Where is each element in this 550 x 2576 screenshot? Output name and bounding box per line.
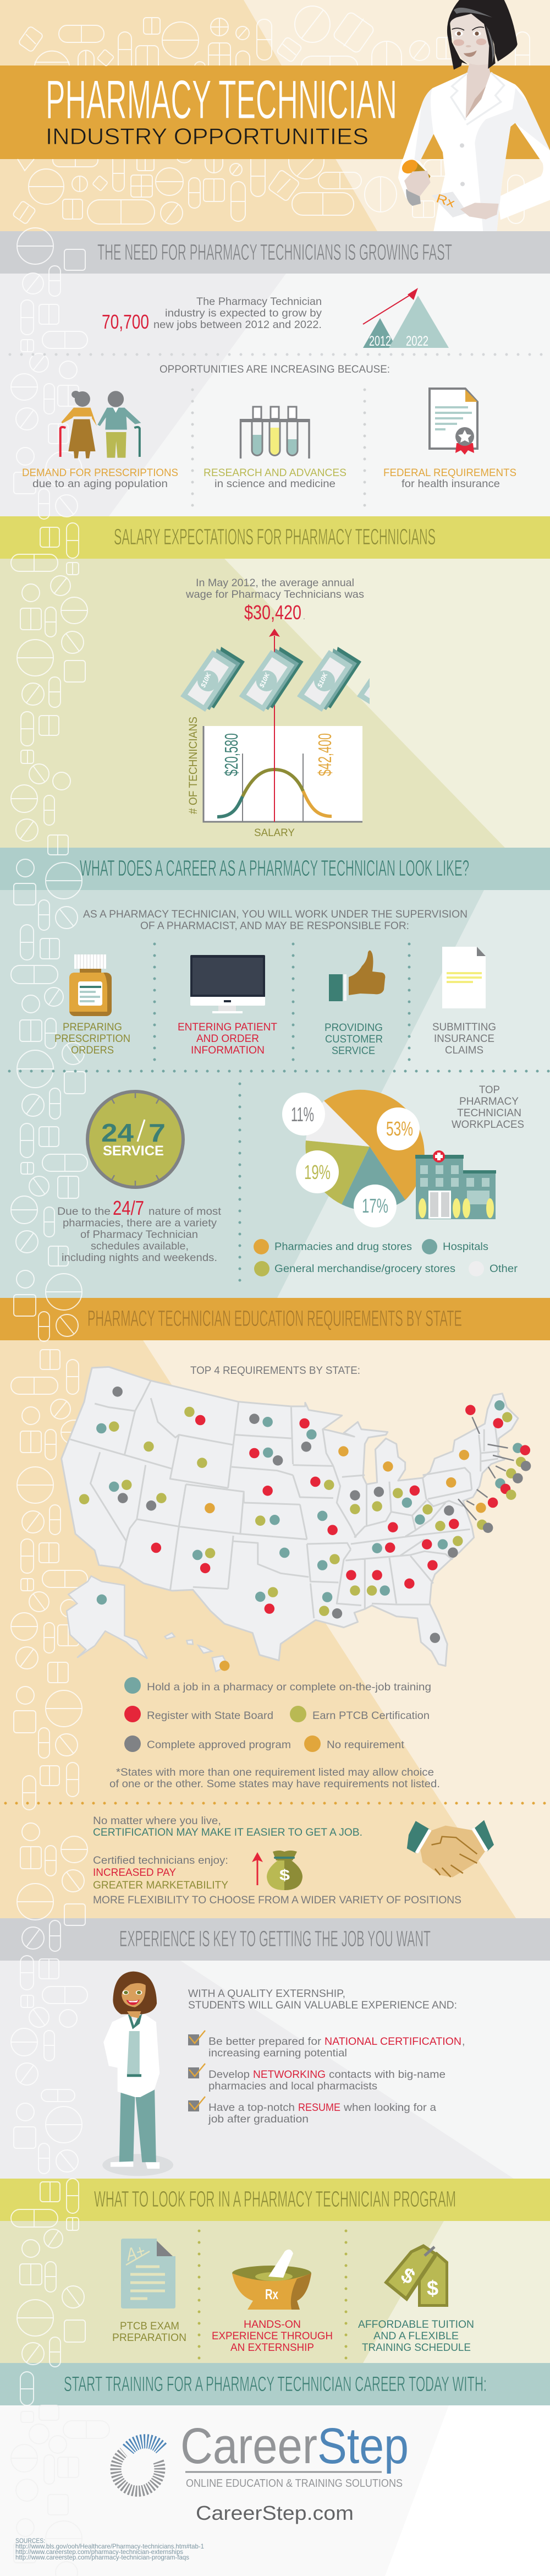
checklist item 1: Be better prepared for: [208, 2035, 322, 2048]
checklist item 3: RESUME: [298, 2102, 340, 2114]
chart: growth mountains: [363, 288, 449, 349]
legend: requirements: [124, 1677, 431, 1752]
icon: 24/7 clock: [87, 1091, 183, 1187]
label: research and advances: RESEARCH AND ADVANCES: [204, 467, 346, 479]
label: entering patient information: INFORMATION: [191, 1044, 265, 1056]
chart: workplaces pie: 19%: [304, 1161, 331, 1183]
axis label: SALARY: [254, 827, 295, 839]
label: preparing prescription orders: [54, 1021, 130, 1056]
icon: money stack 4 cropped: [357, 678, 370, 705]
footnote: states: *States with more than one requirement listed may allow choice: [116, 1766, 434, 1778]
label: hands-on experience: [212, 2318, 333, 2354]
text block: externship: [188, 1988, 457, 2011]
label: submitting insurance claims: INSURANCE: [434, 1033, 494, 1045]
number: 70,700: 70,700: [102, 310, 149, 333]
chart: growth mountains: 2012: [369, 334, 391, 349]
icon: thumbs up: [329, 951, 385, 1001]
text block: certification: INCREASED PAY: [93, 1866, 176, 1879]
checklist item 2: Develop: [208, 2069, 250, 2081]
text block: average wage: .: [303, 612, 305, 621]
sources: http://www.careerstep.com/pharmacy-technician-program-faqs: [15, 2553, 189, 2561]
label: federal requirements: [383, 467, 516, 490]
text block: schedules: [57, 1197, 222, 1264]
map: United States: [62, 1367, 531, 1672]
icon: test tubes: [240, 407, 310, 459]
hero prescription label: Rx: [435, 191, 457, 210]
text block: certification: No matter where you live,: [93, 1815, 221, 1827]
icons: money stacks: [180, 647, 370, 712]
checklist item 3: job after graduation: [208, 2113, 309, 2125]
icon: insurance claim document: [442, 947, 486, 1008]
website: CareerStep.com: [196, 2502, 354, 2524]
icon: 24/7 clock: SERVICE: [103, 1143, 164, 1159]
hero illustration: pharmacist woman: [398, 0, 550, 231]
label: demand for prescriptions: [22, 467, 178, 490]
checklist item 1: ,: [462, 2035, 465, 2048]
checklist item 3: when looking for a: [343, 2102, 436, 2114]
axis label: # OF TECHNICIANS: [187, 717, 200, 814]
icon: money stack 2: $10K: [257, 671, 272, 689]
legend: workplaces: General merchandise/grocery stores: [274, 1263, 455, 1275]
label: entering patient information: ENTERING PATIENT: [178, 1021, 277, 1033]
chart: workplaces pie: 11%: [291, 1103, 314, 1126]
logo: CareerStep: Career: [180, 2418, 317, 2474]
checklist item 2: NETWORKING: [253, 2069, 326, 2081]
label: research and advances: in science and medicine: [215, 478, 336, 490]
sources: http://www.bls.gov/ooh/Healthcare/Pharmacy-technicians.htm#tab-1: [15, 2542, 204, 2550]
icon: money bag: [267, 1851, 302, 1890]
legend: workplaces: Pharmacies and drug stores: [274, 1241, 412, 1253]
chart: workplaces pie: [282, 1090, 425, 1227]
text block: job growth: The Pharmacy Technician: [196, 296, 322, 308]
text block: externship: STUDENTS WILL GAIN VALUABLE EXPERIENCE AND:: [188, 1999, 457, 2011]
icon: mortar and pestle: Rx: [265, 2286, 278, 2302]
label: demand for prescriptions: DEMAND FOR PRESCRIPTIONS: [22, 467, 178, 479]
value: low salary: $20,580: [221, 733, 241, 776]
legend: requirements: Complete approved program: [147, 1739, 291, 1751]
label: entering patient information: [178, 1021, 277, 1056]
icon: hospital: [415, 1150, 496, 1219]
arrow: growth: [363, 288, 418, 324]
icon: money stack 2: [239, 647, 304, 712]
legend: requirements: Register with State Board: [147, 1710, 273, 1722]
chart: workplaces pie: 17%: [362, 1194, 388, 1217]
label: top workplaces: WORKPLACES: [452, 1118, 524, 1131]
logo: CareerStep: ONLINE EDUCATION & TRAINING SOLUTIONS: [186, 2477, 403, 2490]
label: hands-on experience: EXPERIENCE THROUGH: [212, 2330, 333, 2342]
text block: job growth: industry is expected to grow by: [165, 307, 322, 319]
label: hands-on experience: AN EXTERNSHIP: [230, 2342, 314, 2354]
legend: requirements: No requirement: [327, 1739, 405, 1751]
text block: certification: CERTIFICATION MAY MAKE IT EASIER TO GET A JOB.: [93, 1826, 362, 1838]
icon: price tags: $: [397, 2263, 419, 2289]
value: high salary: $42,400: [315, 733, 335, 776]
label: preparing prescription orders: PREPARING: [63, 1021, 122, 1033]
text block: schedules: nature of most: [148, 1205, 222, 1218]
icon: prescription bottle: [69, 954, 112, 1016]
arrow: average salary line: [269, 629, 280, 822]
legend: workplaces: Hospitals: [443, 1241, 488, 1253]
text block: certification: [93, 1815, 461, 1906]
illustration: student pharmacy technician: [102, 1972, 173, 2176]
checklist item 2: pharmacies and local pharmacists: [208, 2080, 377, 2092]
subtitle: INDUSTRY OPPORTUNITIES: [46, 123, 369, 149]
label: top workplaces: PHARMACY: [459, 1095, 519, 1107]
chart: salary bell curve: [187, 717, 362, 839]
text block: supervision: AS A PHARMACY TECHNICIAN, YOU WILL WORK UNDER THE SUPERVISION: [83, 908, 468, 920]
legend: requirements: Hold a job in a pharmacy or complete on-the-job training: [147, 1681, 431, 1693]
sources: http://www.careerstep.com/pharmacy-technician-externships: [15, 2548, 183, 2556]
arrow: increased pay: [252, 1852, 263, 1885]
text block: schedules: Due to the: [57, 1205, 111, 1218]
label: preparing prescription orders: PRESCRIPTION: [54, 1033, 130, 1045]
checklist item 2: [188, 2064, 446, 2092]
sources: [15, 2537, 204, 2561]
icon: 24/7 clock: 7: [148, 1118, 166, 1147]
label: affordable tuition: [358, 2318, 474, 2354]
label: providing customer service: [324, 1022, 383, 1057]
label: top workplaces: TECHNICIAN: [457, 1107, 521, 1119]
checklist item 3: Have a top-notch: [208, 2102, 295, 2114]
label: hands-on experience: HANDS-ON: [244, 2318, 301, 2331]
label: top workplaces: [452, 1084, 524, 1131]
text block: schedules: pharmacies, there are a variety: [63, 1217, 217, 1229]
text block: job growth: [102, 296, 322, 333]
text block: schedules: including nights and weekends.: [62, 1252, 217, 1264]
checklist item 2: contacts with big-name: [329, 2069, 446, 2081]
label: PTCB exam preparation: [112, 2320, 186, 2344]
legend: requirements: Earn PTCB Certification: [312, 1710, 430, 1722]
icon: money stack 1: [180, 647, 245, 712]
icon: handshake: [407, 1820, 494, 1878]
logo: CareerStep: [116, 2418, 409, 2491]
logo mark: [116, 2441, 162, 2491]
text block: average wage: wage for Pharmacy Technicians was: [185, 588, 364, 601]
label: PTCB exam preparation: PTCB EXAM: [120, 2320, 179, 2332]
footnote: states: [109, 1766, 440, 1790]
icon: certificate document: [430, 389, 477, 455]
text block: job growth: new jobs between 2012 and 2022.: [153, 319, 322, 331]
chart: workplaces pie: 53%: [386, 1117, 413, 1140]
sources: SOURCES:: [15, 2537, 45, 2545]
checklist item 1: NATIONAL CERTIFICATION: [324, 2035, 461, 2048]
icon: price tags: $: [427, 2277, 438, 2300]
checklist item 3: [188, 2097, 436, 2125]
label: demand for prescriptions: due to an aging population: [32, 478, 168, 490]
label: federal requirements: FEDERAL REQUIREMENTS: [383, 467, 516, 479]
label: entering patient information: AND ORDER: [196, 1033, 259, 1045]
label: PTCB exam preparation: PREPARATION: [112, 2332, 186, 2344]
icon: money stack 3: $10K: [316, 671, 329, 689]
subheading: opportunities: OPPORTUNITIES ARE INCREASING BECAUSE:: [160, 363, 390, 375]
chart: growth mountains: 2022: [406, 334, 428, 349]
icon: computer monitor: [190, 955, 265, 1013]
label: submitting insurance claims: CLAIMS: [445, 1044, 483, 1056]
label: providing customer service: CUSTOMER: [325, 1033, 383, 1045]
label: affordable tuition: AFFORDABLE TUITION: [358, 2318, 474, 2331]
subheading: top 4 requirements: TOP 4 REQUIREMENTS BY STATE:: [190, 1365, 360, 1377]
label: submitting insurance claims: [432, 1021, 496, 1056]
text block: certification: MORE FLEXIBILITY TO CHOOSE FROM A WIDER VARIETY OF POSITIONS: [93, 1894, 461, 1906]
icon: price tags: [384, 2244, 448, 2307]
number: $30,420: $30,420: [244, 601, 301, 624]
title: [46, 69, 397, 149]
label: providing customer service: PROVIDING: [324, 1022, 383, 1034]
icon: elderly couple: [61, 391, 141, 459]
label: affordable tuition: AND A FLEXIBLE: [373, 2330, 459, 2342]
label: federal requirements: for health insurance: [402, 478, 500, 490]
label: top workplaces: TOP: [479, 1084, 500, 1096]
text block: supervision: [83, 908, 468, 932]
icon: money stack 3: [297, 647, 361, 712]
icon: 24/7 clock: 24: [101, 1118, 134, 1147]
label: research and advances: [204, 467, 346, 490]
icon: exam document: [121, 2239, 175, 2308]
text block: certification: GREATER MARKETABILITY: [93, 1879, 228, 1891]
logo: CareerStep: Step: [317, 2418, 409, 2474]
legend: workplaces: [254, 1239, 518, 1276]
checklist item 1: [188, 2031, 465, 2059]
icon: exam document: A+: [123, 2241, 147, 2265]
text block: schedules: 24/7: [113, 1197, 144, 1219]
label: preparing prescription orders: ORDERS: [71, 1044, 114, 1056]
label: affordable tuition: TRAINING SCHEDULE: [362, 2342, 471, 2354]
footnote: states: of one or the other. Some states may have requirements not listed.: [109, 1778, 440, 1790]
checklist item 1: increasing earning potential: [208, 2047, 347, 2059]
text block: schedules: of Pharmacy Technician: [80, 1229, 198, 1241]
text block: supervision: OF A PHARMACIST, AND MAY BE RESPONSIBLE FOR:: [140, 920, 409, 932]
text block: average wage: In May 2012, the average annual: [196, 577, 354, 589]
legend: workplaces: Other: [490, 1263, 518, 1275]
text block: average wage: [185, 577, 364, 624]
icon: mortar and pestle: [232, 2250, 311, 2310]
text block: externship: WITH A QUALITY EXTERNSHIP,: [188, 1988, 345, 2000]
text block: certification: Certified technicians enjoy:: [93, 1854, 228, 1866]
label: providing customer service: SERVICE: [332, 1045, 375, 1057]
icon: money bag: $: [279, 1866, 290, 1884]
text block: schedules: schedules available,: [91, 1240, 189, 1252]
icon: money stack 1: $10K: [199, 671, 213, 689]
label: submitting insurance claims: SUBMITTING: [432, 1021, 496, 1033]
